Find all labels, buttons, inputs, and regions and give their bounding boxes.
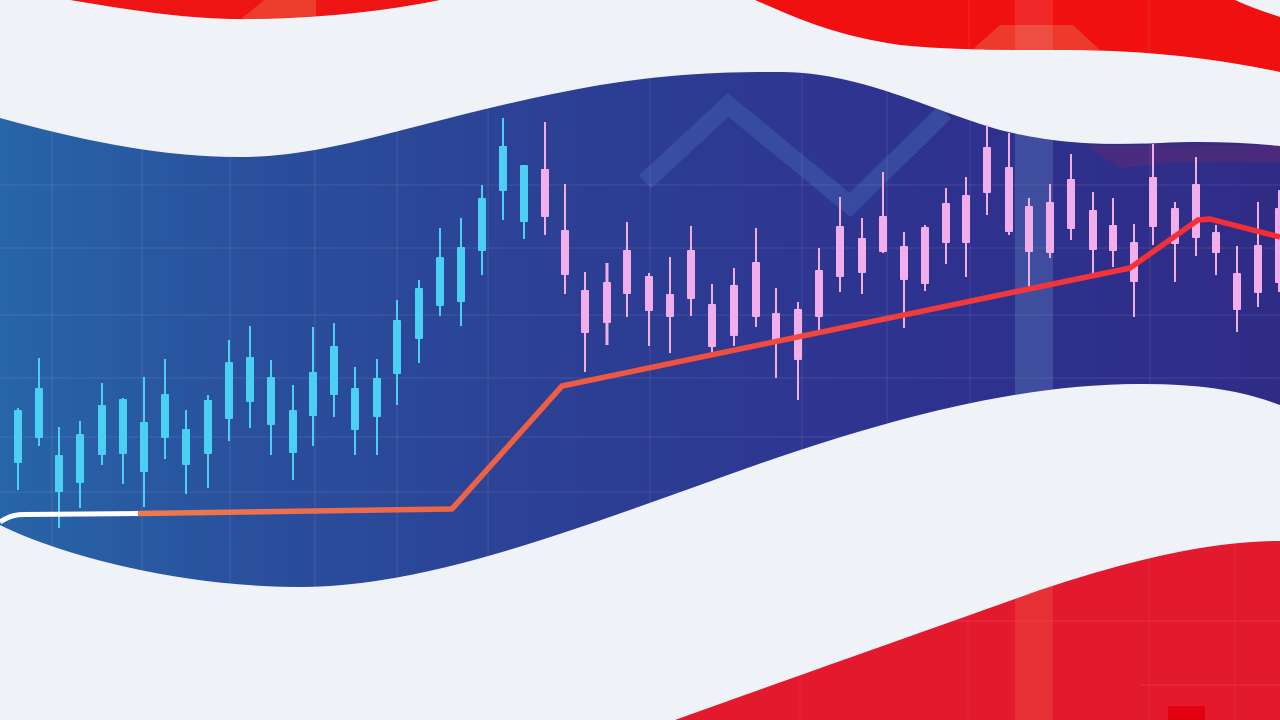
trend line: white start segment <box>0 514 138 522</box>
background ghost arrow <box>645 105 945 205</box>
bottom red stripe <box>675 540 1280 720</box>
top left red stripe <box>70 0 440 20</box>
translucent vertical column <box>1015 134 1053 394</box>
chart grid <box>0 60 1280 600</box>
trend line: red rising segment <box>138 219 1280 514</box>
reddish ghost shape <box>1085 145 1280 168</box>
blue flag band <box>0 60 1280 600</box>
top right red stripe <box>755 0 1280 72</box>
pink candlesticks <box>541 122 1280 400</box>
cyan candlesticks <box>14 118 528 528</box>
